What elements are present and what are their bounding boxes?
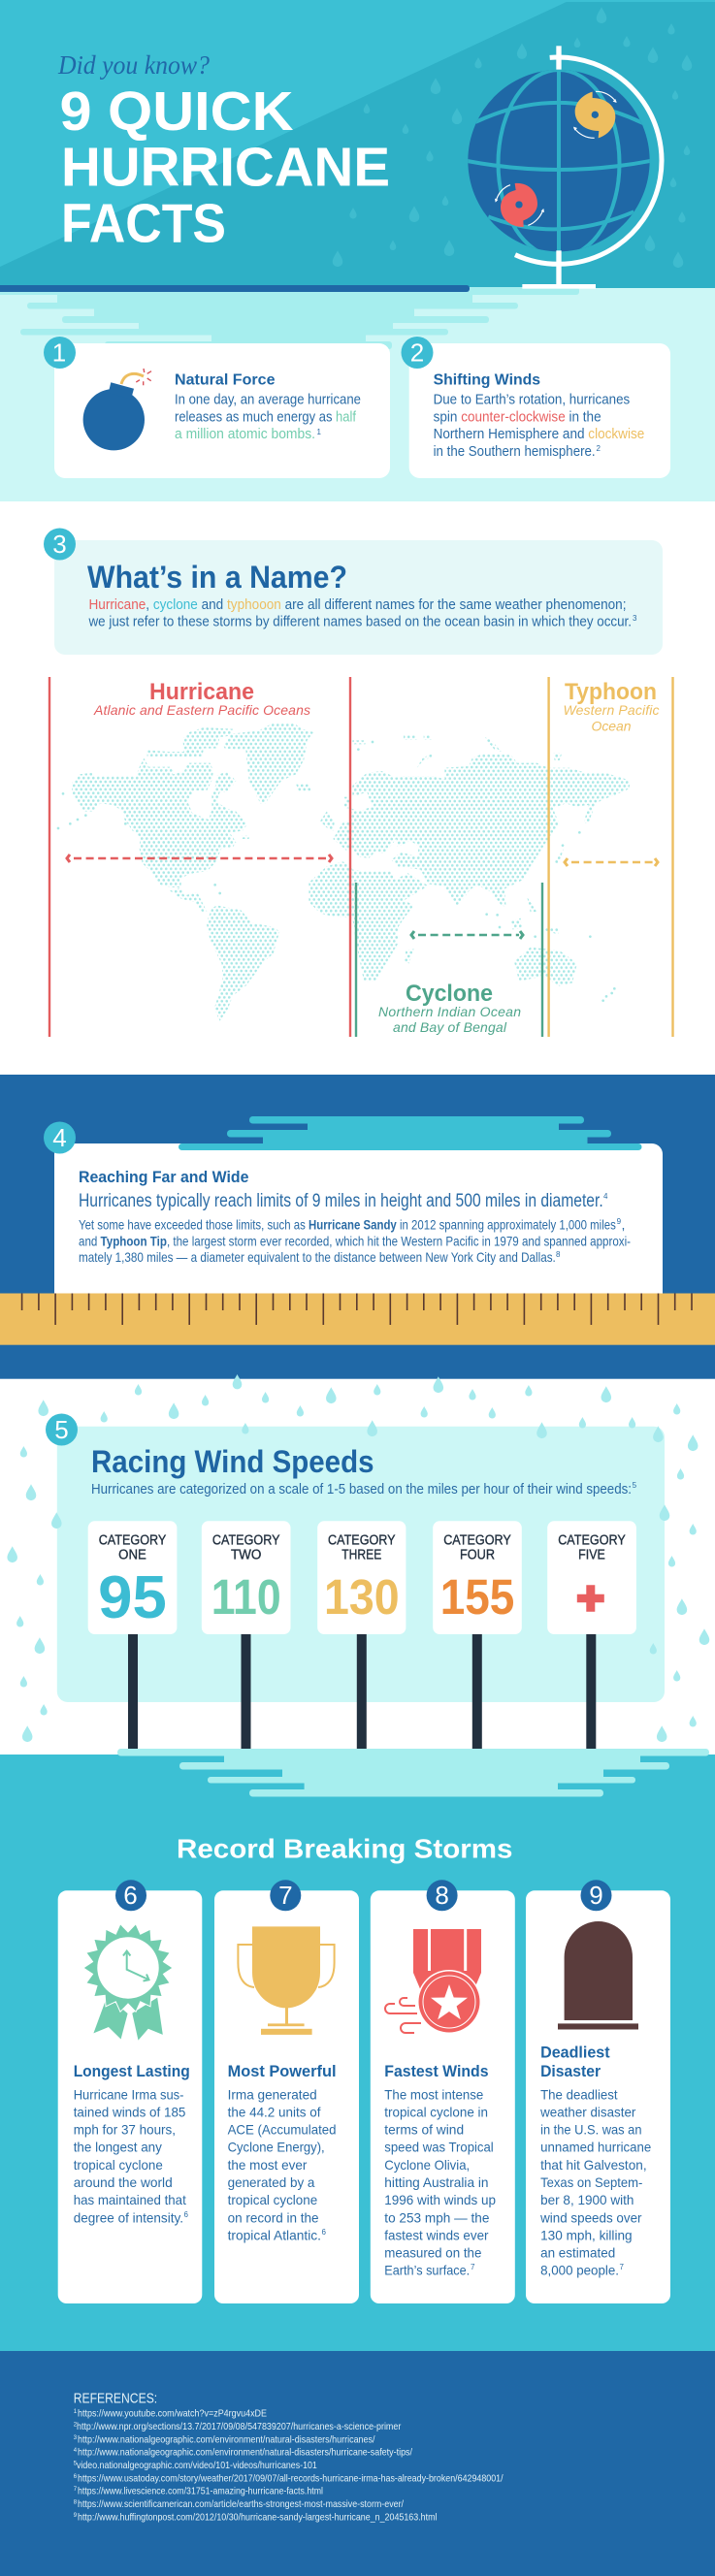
references list: 6 [74,2474,78,2480]
hurricane region [49,677,350,1037]
body text: Earth’s surface. [384,2262,470,2277]
lead text: Hurricanes typically reach limits of 9 miles in height and 500 miles in diameter. [79,1191,603,1211]
sign: category five [547,1521,636,1749]
references list: https://www.scientificamerican.com/article/earths-strongest-most-massive-storm-ever/ [78,2498,404,2510]
region bounds [549,677,673,1037]
body text: releases as much energy as half [175,409,357,425]
references list: 8 [74,2500,78,2506]
sign: category two: TWO [231,1547,261,1563]
references list: video.nationalgeographic.com/video/101-videos/hurricanes-101 [77,2460,317,2471]
number badge 1: 1 [52,338,66,367]
number badge 2 [402,337,433,369]
body text: 7 [619,2263,625,2271]
number badge 5 [46,1414,78,1445]
body text: a million atomic bombs. [175,427,315,442]
body text: tropical cyclone [228,2192,317,2207]
body text: in the Southern hemisphere. [434,444,596,460]
section 4 background [0,1075,715,1379]
header rule [0,285,470,292]
header background [0,0,715,288]
heading: Longest Lasting [74,2062,190,2080]
icon: clock rosette [83,1924,173,2041]
body text: speed was Tropical [384,2140,494,2155]
body text [434,393,644,460]
range arrow [565,858,658,866]
body text: Texas on Septem- [540,2174,643,2190]
body text: measured on the [384,2244,482,2260]
number badge 9 [580,1880,611,1911]
region label: Typhoon [565,679,657,705]
heading: Natural Force [175,372,276,389]
number badge 4: 4 [52,1123,67,1152]
icon: tombstone [558,1921,638,2029]
number badge 3: 3 [52,530,67,559]
references list: https://www.usatoday.com/story/weather/2017/09/07/all-records-hurricane-irma-has-already-broken/642948001/ [78,2472,504,2484]
body text: 9 [617,1217,622,1226]
sign: category one: CATEGORY [99,1532,166,1549]
heading: Disaster [540,2062,601,2080]
body text: 7 [471,2263,475,2271]
body text: Irma generated [228,2086,317,2102]
storm: counter-clockwise [573,91,617,138]
cyclone region: and Bay of Bengal [393,1019,507,1035]
body text: the most ever [228,2157,308,2173]
icon: medal with wind [385,1929,481,2034]
grid lines [466,68,652,257]
number badge 8 [427,1880,458,1911]
body text: tropical Atlantic. [228,2227,321,2242]
body text: an estimated [540,2244,615,2260]
body text: ACE (Accumulated [228,2122,336,2138]
body text: we just refer to these storms by different names based on the ocean basin in which they occur. [88,613,632,630]
cloud over panel 4 [227,1116,611,1144]
sign: category three [317,1521,406,1749]
stand [515,46,662,289]
number badge 3 [44,528,76,561]
cyclone region: Northern Indian Ocean [378,1004,521,1019]
sign: category five: FIVE [578,1547,605,1563]
heading: Fastest Winds [384,2062,489,2080]
number badge 2: 2 [410,338,424,367]
subheading: Hurricanes are categorized on a scale of 1-5 based on the miles per hour of their wind speeds: [91,1482,632,1497]
section 5 heading block: 5 [633,1481,637,1490]
body text: fastest winds ever [384,2227,489,2242]
references list: 2 [74,2423,78,2429]
references list: 3 [74,2435,78,2441]
references list: https://www.youtube.com/watch?v=zP4rgvu4xDE [78,2408,267,2420]
body text: weather disaster [539,2105,636,2120]
header raindrops [333,7,692,268]
number badge 4 [44,1121,76,1154]
number badge 6 [115,1880,146,1911]
main title: FACTS [61,192,226,254]
references list: 9 [74,2513,78,2519]
storm: clockwise [495,183,544,227]
sign: category five: CATEGORY [558,1532,626,1549]
typhoon region [549,677,673,1037]
body text: Cyclone Olivia, [384,2157,470,2173]
body text: the longest any [74,2140,162,2155]
sign: category two: CATEGORY [212,1532,279,1549]
body text: mately 1,380 miles — a diameter equivalent to the distance between New York City and Dallas. [79,1249,556,1265]
references list: 7 [74,2487,78,2493]
body text: on record in the [228,2209,319,2225]
references list [74,2408,504,2523]
body text: has maintained that [74,2192,186,2207]
americas and greenland [57,724,313,1021]
section title: record breaking storms: Record Breaking Storms [177,1834,512,1864]
body text: Northern Hemisphere and clockwise [434,427,644,442]
main title: HURRICANE [61,137,390,199]
sign: category three: THREE [341,1547,381,1563]
panel: fact 1 natural force [44,337,390,478]
cloud base [179,1143,642,1150]
heading [540,2043,610,2080]
body text [175,393,361,442]
body text: hitting Australia in [384,2174,489,2190]
body text: 6 [322,2228,326,2237]
references list: 5 [74,2462,78,2467]
heading: Reaching Far and Wide [79,1168,248,1186]
panel: fact 5 racing wind speeds backdrop [57,1427,665,1702]
icon: bomb [83,369,151,450]
body text [228,2086,336,2242]
panel: fact 9 deadliest disaster [526,1880,670,2303]
sign: category one: 95 [98,1564,167,1631]
heading: Deadliest [540,2043,610,2061]
region bounds [356,883,542,1037]
body text: the 44.2 units of [228,2105,321,2120]
references list: http://www.huffingtonpost.com/2012/10/30/hurricane-sandy-largest-hurricane_n_2045163.html [78,2511,437,2523]
section 5 heading block [46,1414,637,1497]
sign: category four: CATEGORY [443,1532,511,1549]
body text: Yet some have exceeded those limits, such as Hurricane Sandy in 2012 spanning approximately 1,000 miles [79,1217,616,1233]
body text: , [621,1217,625,1233]
references list: http://www.nationalgeographic.com/environment/natural-disasters/hurricane-safety-tips/ [78,2447,412,2459]
number badge 7 [270,1880,301,1911]
sign: category two [202,1521,291,1749]
body text: Hurricane, cyclone and typhooon are all different names for the same weather phenomenon; [89,596,627,613]
heading: Shifting Winds [434,372,540,389]
body text: 3 [633,614,637,623]
heading: What’s in a Name? [87,560,347,595]
references list: http://www.nationalgeographic.com/environment/natural-disasters/hurricanes/ [78,2433,375,2445]
hurricane region: Atlanic and Eastern Pacific Oceans [93,702,310,718]
body text: to 253 mph — the [384,2209,490,2225]
body text: tropical cyclone in [384,2105,488,2120]
kicker: Did you know? [57,50,210,80]
body text: ber 8, 1900 with [540,2192,634,2207]
sign: category four: 155 [440,1569,514,1625]
body text: around the world [74,2174,173,2190]
ruler [0,1294,715,1345]
panel: fact 4 reaching far and wide: 4 [603,1192,608,1201]
typhoon region: Western Pacific [563,702,660,718]
icon: trophy [238,1926,335,2035]
panel: fact 6 longest lasting [58,1880,202,2303]
body text: degree of intensity. [74,2209,183,2225]
references list: 1 [74,2409,78,2415]
sign: category three: 130 [324,1569,400,1625]
body text: that hit Galveston, [540,2157,647,2173]
panel: fact 2 shifting winds [402,337,670,478]
body text: wind speeds over [539,2209,642,2225]
number badge 9: 9 [589,1881,603,1910]
body text: The deadliest [540,2086,618,2102]
main title: 9 QUICK [60,80,293,143]
sign: category one: ONE [118,1547,146,1563]
sign: category four: FOUR [460,1547,495,1563]
panel: fact 8 fastest winds [371,1880,515,2303]
body text: mph for 37 hours, [74,2122,176,2138]
world dot map [57,724,631,1021]
body text: Hurricane Irma sus- [74,2086,184,2102]
body text: 1 [316,428,322,436]
body text [539,2086,651,2277]
body text: tropical cyclone [74,2157,163,2173]
sign: category four [433,1521,522,1749]
range arrow [411,931,523,939]
region label: Hurricane [149,679,254,705]
raindrops section 5 [7,1374,709,1742]
range arrow [67,854,332,862]
body text: 8 [556,1250,561,1259]
number badge 1 [44,337,76,369]
body text: 1996 with winds up [384,2192,496,2207]
references heading: REFERENCES: [74,2391,157,2406]
body text: The most intense [384,2086,483,2102]
body text: unnamed hurricane [540,2140,651,2155]
body text [74,2086,188,2225]
body text: generated by a [228,2174,315,2190]
body text: terms of wind [384,2122,464,2138]
body text: In one day, an average hurricane [175,393,361,408]
body text [79,1217,631,1265]
number badge 7: 7 [278,1881,293,1910]
body text: spin counter-clockwise in the [434,409,601,425]
region label: Cyclone [406,981,493,1007]
number badge 8: 8 [435,1881,449,1910]
references list: 4 [74,2448,78,2454]
main title [60,80,390,254]
section 6 background [0,1755,715,2352]
body text: tained winds of 185 [74,2105,186,2120]
heading: Racing Wind Speeds [91,1444,374,1479]
title block [57,50,390,254]
globe sphere [468,70,650,251]
body text: Cyclone Energy), [228,2140,325,2155]
body text [384,2086,496,2277]
body text [88,596,637,630]
number badge 6: 6 [123,1881,138,1910]
panel: fact 3 what's in a name [44,528,663,655]
references list: http://www.npr.org/sections/13.7/2017/09/08/547839207/hurricanes-a-science-primer [77,2421,402,2432]
references section [0,2351,715,2576]
body text: 8,000 people. [540,2262,619,2277]
panel: fact 4 reaching far and wide [44,1121,663,1300]
body text: and Typhoon Tip, the largest storm ever recorded, which hit the Western Pacific in 1979 and spanned approxi- [79,1233,631,1248]
sign: category one [88,1521,177,1749]
heading: Most Powerful [228,2062,336,2080]
number badge 5: 5 [54,1415,69,1444]
panel: fact 7 most powerful [214,1880,359,2303]
body text: in the U.S. was an [540,2122,642,2138]
sign: category three: CATEGORY [328,1532,396,1549]
globe illustration [466,46,662,289]
typhoon region: Ocean [592,718,632,733]
body text: Due to Earth’s rotation, hurricanes [434,393,630,408]
references list: https://www.livescience.com/31751-amazing-hurricane-facts.html [78,2486,323,2497]
puddle [117,1749,709,1796]
cloud band background [0,287,715,501]
europe asia africa australia [309,735,631,1002]
body text: 6 [184,2210,188,2219]
body text: 130 mph, killing [540,2227,633,2242]
body text: 2 [596,444,601,453]
region bounds [49,677,350,1037]
sign: category two: 110 [211,1569,281,1625]
cyclone region [356,883,542,1037]
